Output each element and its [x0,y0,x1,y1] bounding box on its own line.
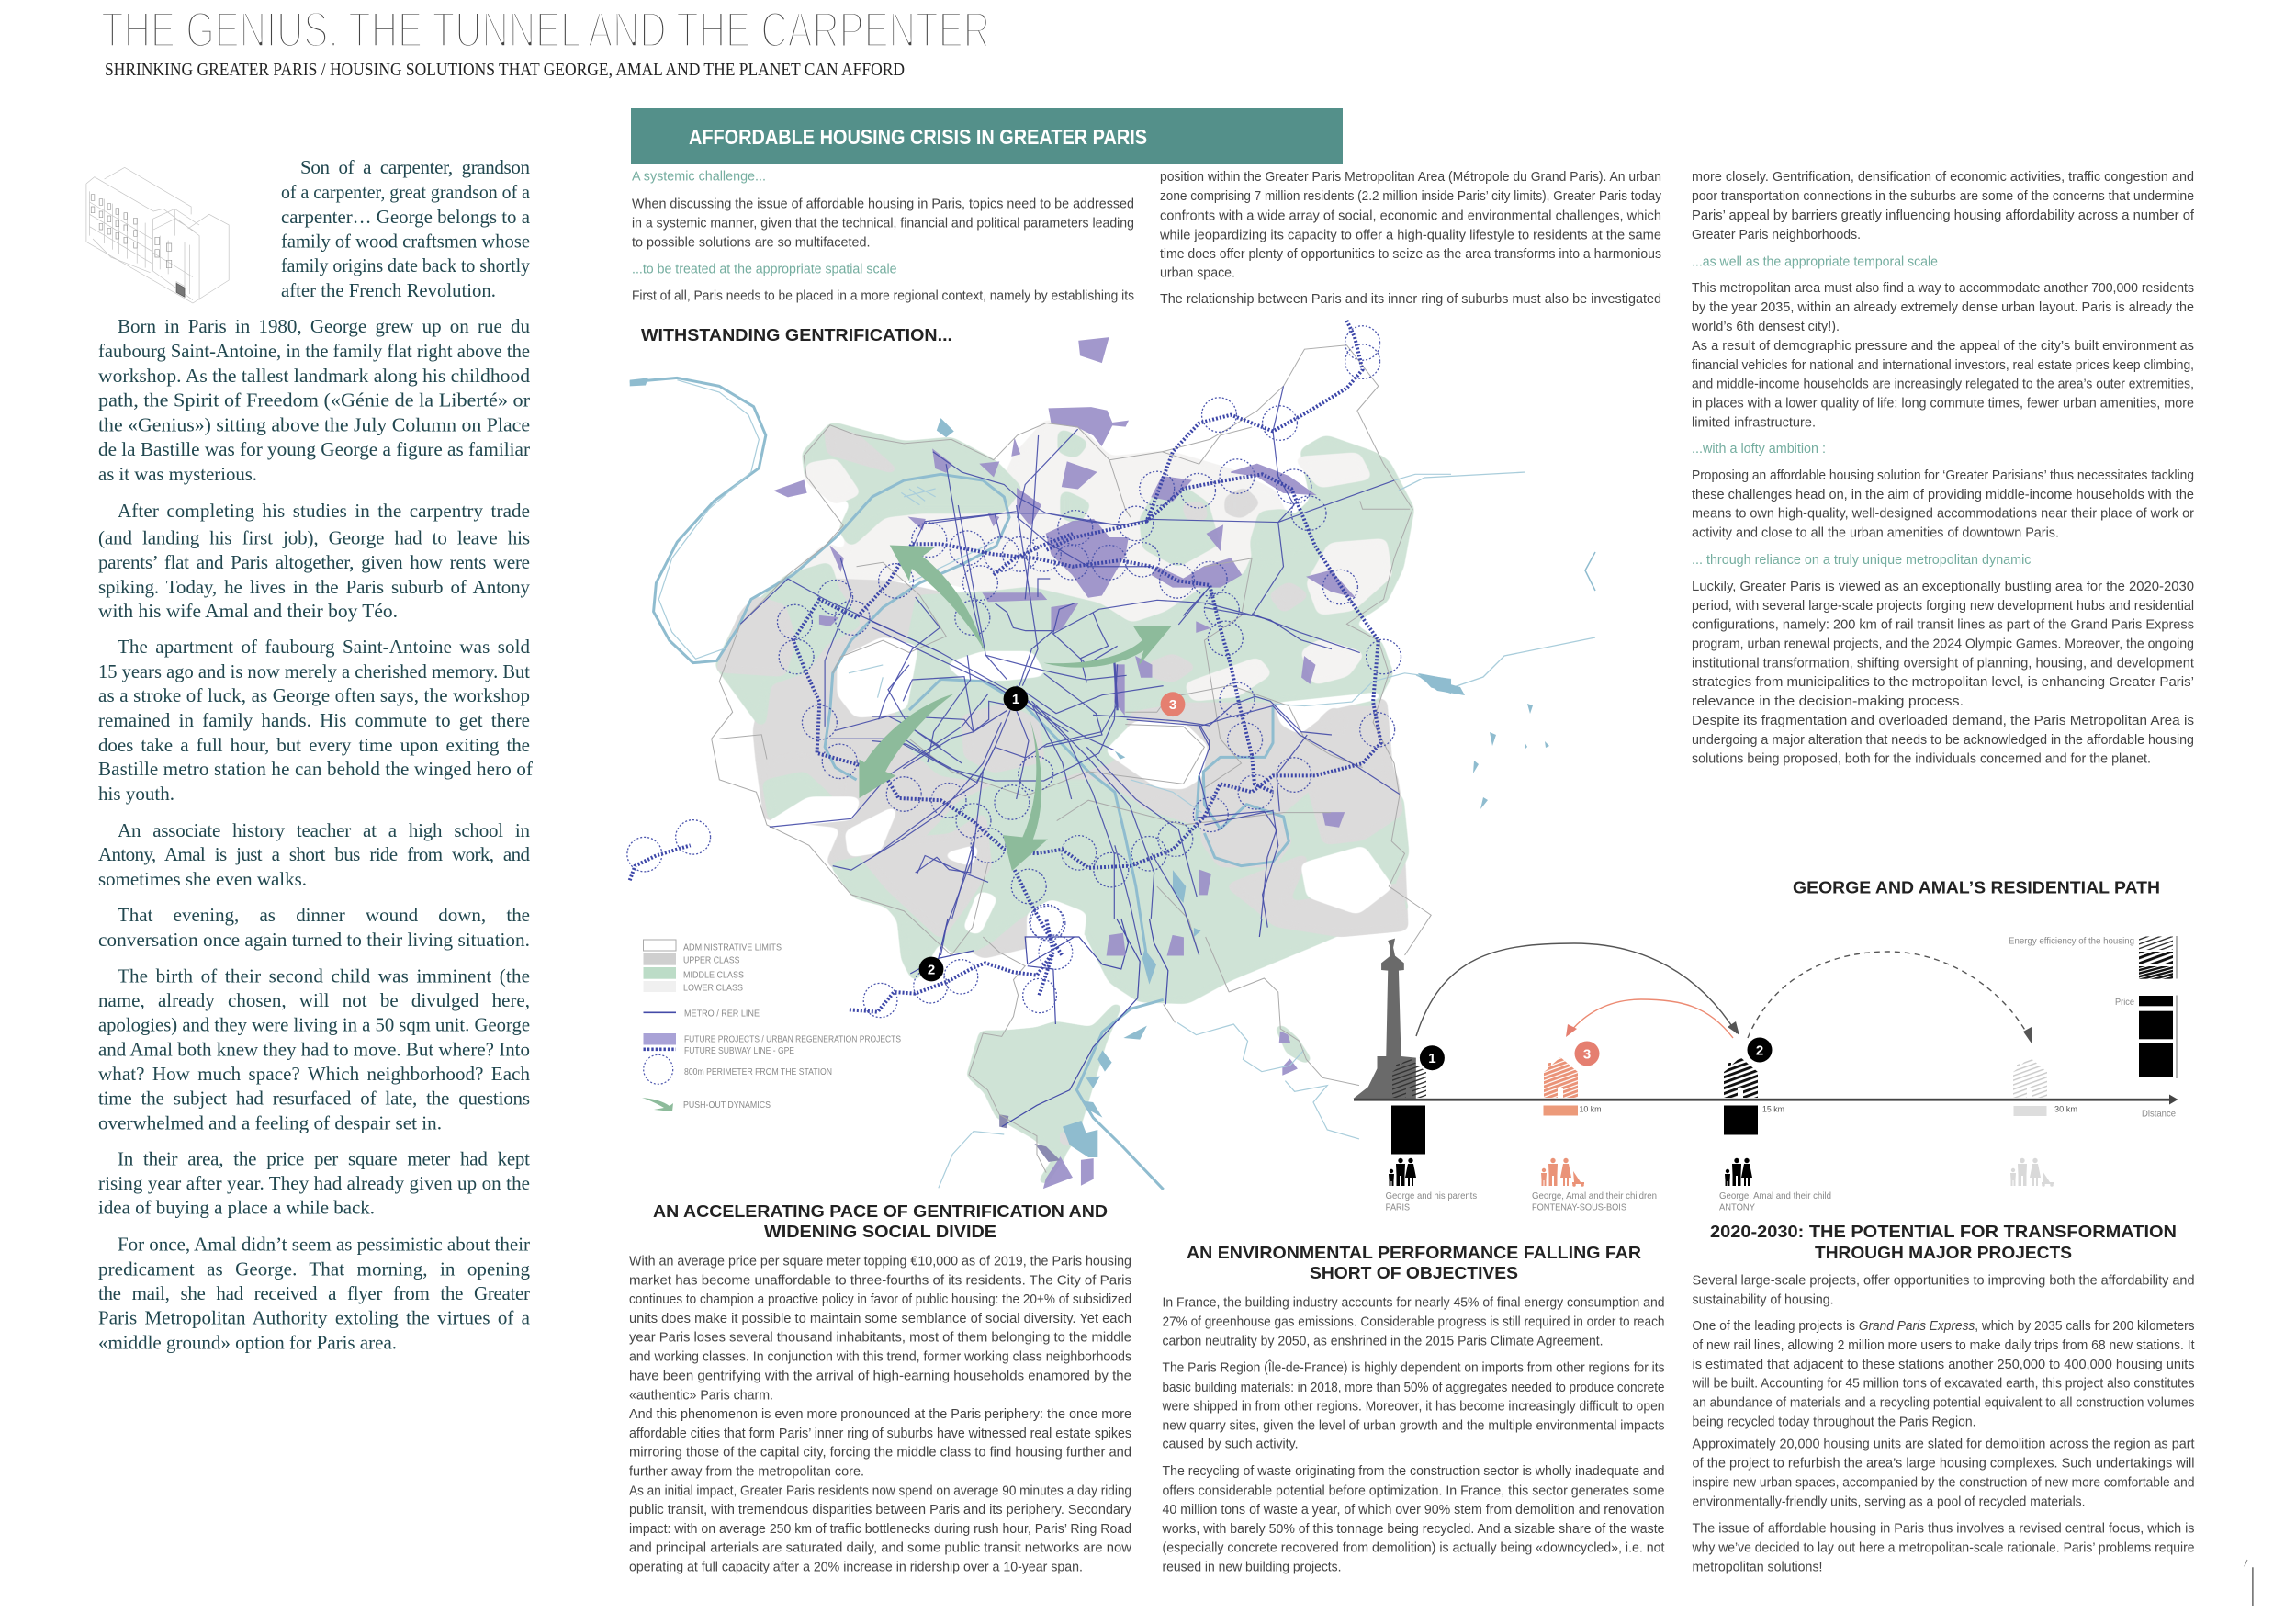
text block: environmental performance: 40 million tons of waste a year, of which over 90% stem from demolition and renovation [1163,1502,1664,1517]
paragraph: the birth: The birth of their second child was imminent (the [118,964,530,987]
heading: environmental performance [1187,1244,1641,1282]
icon: July Column [1353,939,1416,1099]
administrative borders [712,345,1431,955]
text block: gentrification: year Paris loses several thousand inhabitants, most of them belonging to the middle [629,1330,1131,1346]
text block: potential for transformation: metropolitan solutions! [1692,1559,1822,1574]
paragraph: son of a carpenter: of a carpenter, great grandson of a [281,181,531,203]
rivers [630,378,1451,955]
map marker 1 [1004,686,1028,711]
title: THE GENIUS, THE TUNNEL AND THE CARPENTER [101,1,990,58]
subtitle: SHRINKING GREATER PARIS / HOUSING SOLUTIONS THAT GEORGE, AMAL AND THE PLANET CAN AFFORD [105,61,905,80]
marker 3: 3 [1583,1047,1591,1062]
price bar Fontenay [1543,1104,1602,1115]
arrow: north-west push-out [890,546,985,653]
legend: lower class: LOWER CLASS [683,983,743,993]
text block: potential for transformation: of new rail lines, allowing 2 million more users to make daily trips from 68 new stations. It [1692,1337,2195,1353]
text block: crisis column 2: urban space. [1160,265,1235,281]
text block: crisis column 2: position within the Greater Paris Metropolitan Area (Métropole du Grand Paris). An urban [1160,169,1661,185]
text block: potential for transformation: Several large-scale projects, offer opportunities to improving both the affordability and [1692,1272,2195,1288]
paragraph: the birth: name, already chosen, will not be divulged here, [98,989,530,1011]
text block: crisis column 3: Paris’ appeal by barriers greatly influencing housing affordability across a number of [1692,208,2195,223]
legend: metro line: METRO / RER LINE [684,1009,760,1020]
text block: potential for transformation [1692,1272,2195,1574]
text block: crisis column 3: period, with several large-scale projects forging new development hubs and residential [1692,598,2194,614]
text block: crisis column 3: Proposing an affordable housing solution for ‘Greater Parisians’ thus necessitates tackling [1692,468,2194,483]
marker 1 [1420,1045,1445,1070]
text block: crisis column 2: time does offer plenty of opportunities to seize as the area transforms into a harmonious [1160,246,1661,262]
text block: crisis column 3: solutions being proposed, both for the individuals concerned and for the planet. [1692,751,2151,766]
paragraph: born in Paris: Born in Paris in 1980, George grew up on rue du [118,315,531,337]
banner: affordable housing crisis [631,108,1343,164]
family: future household [2010,1158,2054,1187]
arc: Paris to Antony [1416,943,1737,1036]
text block: gentrification: public transit, with tremendous disparities between Paris and its periphery. Secondary [629,1502,1131,1517]
legend: metro line [643,1009,760,1020]
arrowhead [2023,1027,2032,1043]
paragraph: the apartment: remained in family hands. His commute to get there [98,709,530,731]
paragraph: the apartment: The apartment of faubourg Saint-Antoine was sold [118,636,531,658]
paragraph: son of a carpenter: Son of a carpenter, grandson [300,156,531,178]
paragraph: for once: «middle ground» option for Paris area. [98,1331,397,1353]
legend: upper class: UPPER CLASS [683,955,740,965]
map: Greater Paris gentrification map [627,321,1595,1190]
map marker 1: 1 [1012,692,1019,707]
family: George, Amal and child [1719,1158,1831,1213]
map marker 3 [1161,692,1185,716]
legend: administrative limits [643,940,782,953]
text block: potential for transformation: is estimated that adjacent to these stations another 250,000 to 400,000 housing units [1692,1357,2195,1372]
map regions north and centre [719,423,1410,999]
text block: gentrification: market has become unaffordable to three-fourths of its residents. The City of Paris [629,1272,1131,1288]
page number [2244,1560,2254,1606]
price bar Fontenay: 10 km [1580,1104,1602,1115]
text block: crisis column 3: by the year 2035, within an already extremely dense urban layout. Paris is already the [1692,299,2194,315]
text block: crisis column 3: poor transportation connections in the suburbs are some of the concerns that undermine [1692,188,2194,204]
text block: crisis column 1: A systemic challenge... [632,169,766,185]
paragraph: an associate history teacher: An associate history teacher at a high school in [118,819,531,841]
heading: accelerating pace of gentrification [653,1202,1108,1241]
paragraph: in their area [98,1147,530,1219]
text block: gentrification: With an average price per square meter topping €10,000 as of 2019, the Paris housing [629,1254,1131,1269]
text block: crisis column 3: configurations, namely: 200 km of rail transit lines as part of the Grand Paris Express [1692,617,2194,633]
paragraph: after completing: spiking. Today, he lives in the Paris suburb of Antony [98,576,531,598]
paragraph: the apartment: Bastille metro station he can behold the winged hero of [98,758,533,780]
heading: residential path: GEORGE AND AMAL’S RESIDENTIAL PATH [1793,878,2160,897]
heading: 2020-2030 potential for transformation: 2020-2030: THE POTENTIAL FOR TRANSFORMATION [1710,1223,2177,1241]
legend: future subway: FUTURE SUBWAY LINE - GPE [684,1046,794,1056]
paragraph: in their area: rising year after year. They had already given up on the [98,1172,530,1194]
text block: crisis column 1: First of all, Paris needs to be placed in a more regional context, namely by establishing its [632,288,1134,304]
energy efficiency scale: Energy efficiency of the housing [2009,936,2134,947]
text block: crisis column 3: more closely. Gentrification, densification of economic activities, traffic congestion and [1692,169,2194,185]
chart: George and Amal's residential path [1353,936,2178,1213]
paragraph: an associate history teacher: sometimes she even walks. [98,868,307,890]
text block: environmental performance: reused in new building projects. [1163,1560,1341,1575]
text block: crisis column 3: financial vehicles for national and international investors, real estate prices keep climbing, [1692,357,2194,373]
legend: lower class [643,981,743,993]
text block: crisis column 3: institutional transformation, shifting oversight of planning, housing, and development [1692,656,2195,671]
house: Antony [1724,1057,1758,1098]
legend: future projects: FUTURE PROJECTS / URBAN REGENERATION PROJECTS [684,1035,901,1045]
text block: gentrification: As an initial impact, Greater Paris residents now spend on average 90 minutes a day riding [629,1483,1131,1498]
legend: middle class: MIDDLE CLASS [683,970,744,980]
paragraph: an associate history teacher [98,819,531,890]
text block: environmental performance: The Paris Region (Île-de-France) is highly dependent on imports from other regions for its [1163,1360,1664,1376]
text block: crisis column 1 [632,169,1134,304]
house: Paris [1392,1057,1426,1098]
text block: gentrification: and working classes. In conjunction with this trend, former working class neighborhoods [629,1349,1131,1365]
marker 2 [1747,1038,1773,1062]
text block: crisis column 3: This metropolitan area must also find a way to accommodate another 700,000 residents [1692,280,2194,296]
family: George, Amal and children: George, Amal and their children [1532,1190,1657,1201]
heading: 2020-2030 potential for transformation [1710,1223,2177,1262]
legend: middle class [643,967,744,980]
heading: accelerating pace of gentrification: AN ACCELERATING PACE OF GENTRIFICATION AND [653,1202,1108,1221]
text block: gentrification: impact: with on average 250 km of traffic bottlenecks during rush hour, Paris’ Ring Road [629,1521,1131,1537]
text block: crisis column 3 [1691,169,2195,766]
paragraph: in their area: idea of buying a place a while back. [98,1197,375,1219]
text block: potential for transformation: The issue of affordable housing in Paris thus involves a revised central focus, which is [1692,1521,2195,1537]
price bar Antony: 15 km [1762,1104,1784,1115]
arrow: east push-out [1043,626,1172,668]
text block: potential for transformation: Approximately 20,000 housing units are slated for demolition across the region as part [1692,1437,2195,1452]
text block: crisis column 2: while jeopardizing its capacity to offer a high-quality lifestyle to residents at the same [1159,227,1661,242]
text block: crisis column 1: ...to be treated at the appropriate spatial scale [632,261,896,276]
text block: crisis column 3: Despite its fragmentation and overloaded demand, the Paris Metropolitan Area is [1692,713,2194,728]
arc: Antony to Fontenay [1570,999,1733,1038]
text block: gentrification: affordable cities that form Paris’ inner ring of suburbs have witnessed real estate spikes [629,1426,1131,1441]
legend: push-out dynamics [642,1098,771,1111]
family: George and his parents: George and his parents [1386,1190,1477,1201]
metro network centre [872,505,1332,919]
project areas purple [775,338,1355,955]
text block: environmental performance: carbon neutrality by 2050, as enshrined in the 2015 Paris Climate Agreement. [1163,1333,1604,1348]
paragraph: the birth: what? How much space? Which neighborhood? Each [98,1063,531,1085]
text block: crisis column 3: Luckily, Greater Paris is viewed as an exceptionally bustling area for the 2020-2030 [1692,579,2194,594]
paragraph: for once: Paris Metropolitan Authority extoling the virtues of a [98,1307,531,1329]
text block: crisis column 2: The relationship between Paris and its inner ring of suburbs must also be investigated [1160,291,1661,307]
paragraph: for once: predicament as George. That morning, in opening [98,1257,531,1280]
text block: potential for transformation: environmentally-friendly units, serving as a pool of recycled materials. [1692,1494,2085,1509]
distance axis: Distance [2142,1109,2176,1120]
paragraph: born in Paris [98,315,531,485]
price scale [2115,996,2177,1078]
paragraph: for once: For once, Amal didn’t seem as pessimistic about their [118,1234,530,1256]
future subway line GPE [630,321,1381,955]
paragraph: born in Paris: the «Genius») sitting above the July Column on Place [98,413,530,435]
marker 3 [1574,1042,1600,1066]
map marker 2: 2 [928,963,935,977]
text block: gentrification: mirroring those of the capital city, forcing the middle class to find housing further and [629,1445,1131,1460]
paragraph: the birth [98,964,531,1133]
family: George, Amal and children: FONTENAY-SOUS-BOIS [1532,1202,1626,1213]
house: Fontenay-sous-Bois [1544,1057,1578,1098]
paragraph: the apartment: does take a full hour, but every time upon exiting the [98,734,530,756]
text block: environmental performance: The recycling of waste originating from the construction sector is wholly inadequate and [1163,1463,1664,1479]
paragraph: the apartment: 15 years ago and is now merely a cherished memory. But [98,660,530,682]
text block: gentrification: «authentic» Paris charm. [629,1387,773,1403]
marker 2: 2 [1756,1043,1763,1058]
banner: affordable housing crisis: AFFORDABLE HOUSING CRISIS IN GREATER PARIS [689,125,1147,149]
metro and RER lines [740,386,1400,955]
push-out arrows [859,546,1172,871]
text block: potential for transformation: why we’ve decided to lay out here a metropolitan-scale rationale. Paris’ problems require [1692,1540,2195,1556]
paragraph: the birth: apologies) and they were living in a 50 sqm unit. George [98,1014,530,1036]
heading: environmental performance: SHORT OF OBJECTIVES [1310,1264,1518,1282]
paragraph: the birth: overwhelmed and a feeling of despair set in. [98,1111,442,1133]
text block: crisis column 3: strategies from municipalities to the metropolitan level, is enhancing Greater Paris’ [1692,674,2194,690]
price bar future [2013,1104,2077,1116]
energy efficiency scale [2009,936,2177,979]
text block: potential for transformation: inspire new urban spaces, accompanied by the construction of new more comfortable and [1692,1474,2195,1490]
text block: crisis column 2: confronts with a wide array of social, economic and environmental challenges, which [1160,208,1661,223]
text block: gentrification: further away from the metropolitan core. [629,1463,864,1479]
family: George and his parents: PARIS [1386,1202,1410,1213]
map marker 3: 3 [1169,697,1176,713]
text block: potential for transformation: of the project to refurbish the area’s large housing complexes. Such undertakings will [1692,1456,2195,1472]
paragraph: son of a carpenter: family of wood craftsmen whose [281,230,530,252]
text block: gentrification [629,1254,1131,1575]
paragraph: son of a carpenter: carpenter… George belongs to a [281,206,531,228]
text block: gentrification: have been gentrifying with the arrival of high-earning households enamored by the [629,1369,1131,1384]
text block: George story (left column) [98,156,533,1353]
map regions south [850,905,1359,1190]
price scale: Price [2115,997,2134,1008]
legend: push-out dynamics: PUSH-OUT DYNAMICS [683,1100,771,1111]
text block: crisis column 1: in a systemic manner, given that the technical, financial and political parameters leading [632,216,1134,231]
paragraph: born in Paris: de la Bastille was for young George a figure as familiar [98,438,530,460]
paragraph: the apartment: as a stroke of luck, as George often says, the workshop [98,684,530,706]
heading: accelerating pace of gentrification: WIDENING SOCIAL DIVIDE [764,1223,996,1241]
text block: crisis column 3: program, urban renewal projects, and the 2024 Olympic Games. Moreover, the ongoing [1692,636,2194,652]
paragraph: after completing: parents’ flat and Paris altogether, given how rents were [98,551,530,573]
eastern rivers and lakes [1399,472,1595,809]
text block: crisis column 3: ... through reliance on a truly unique metropolitan dynamic [1692,552,2032,568]
text block: crisis column 3: in places with a lower quality of life: long commute times, fewer urban amenities, more [1692,395,2194,412]
text block: environmental performance: caused by such activity. [1163,1437,1299,1452]
legend: station perimeter: 800m PERIMETER FROM THE STATION [684,1067,832,1077]
text block: environmental performance [1162,1295,1665,1575]
paragraph: that evening: That evening, as dinner wound down, the [118,904,530,926]
legend: administrative limits: ADMINISTRATIVE LIMITS [683,942,782,953]
paragraph: son of a carpenter: family origins date back to shortly [281,254,530,276]
text block: environmental performance: were shipped in from other regions. Moreover, it has become increasingly difficult to open [1162,1399,1664,1415]
arrowhead [1728,1021,1739,1035]
text block: environmental performance: works, with barely 50% of this tonnage being recycled. And a sizable share of the waste [1162,1521,1664,1537]
paragraph: born in Paris: workshop. As the tallest landmark along his childhood [98,365,531,387]
text block: crisis column 1: When discussing the issue of affordable housing in Paris, topics need to be addressed [632,197,1134,212]
text block: crisis column 3: As a result of demographic pressure and the appeal of the city’s built environment as [1692,338,2194,354]
text block: gentrification: And this phenomenon is even more pronounced at the Paris periphery: the once more [629,1406,1131,1422]
text block: crisis column 3: Greater Paris neighborhoods. [1692,227,1861,242]
text block: crisis column 3: ...with a lofty ambition : [1692,441,1826,457]
arrow: south push-out [1003,718,1048,871]
paragraph: after completing: After completing his studies in the carpentry trade [118,500,530,522]
arc: Antony to future [1748,952,2030,1038]
text block: potential for transformation: being recycled today throughout the Paris Region. [1692,1414,1976,1429]
text block: environmental performance: 27% of greenhouse gas emissions. Considerable progress is still required in order to reach [1163,1314,1664,1329]
text block: gentrification: and principal arterials are saturated daily, and some public transit networks are now [629,1540,1131,1556]
text block: potential for transformation: sustainability of housing. [1692,1291,1833,1307]
paragraph: that evening: conversation once again turned to their living situation. [98,929,530,951]
legend: future projects [643,1033,901,1045]
paragraph: an associate history teacher: Antony, Amal is just a short bus ride from work, and [98,843,531,865]
text block: crisis column 3: means to own high-quality, well-designed accommodations near their place of work or [1692,505,2194,522]
paragraph: born in Paris: faubourg Saint-Antoine, in the family flat right above the [98,340,530,362]
text block: environmental performance: (especially concrete recovered from demolition) is actually being «downcycled», i.e. not [1163,1540,1665,1556]
paragraph: the apartment [98,636,533,805]
heading: environmental performance: AN ENVIRONMENTAL PERFORMANCE FALLING FAR [1187,1244,1641,1262]
text block: crisis column 2 [1159,169,1661,307]
paragraph: after completing: (and landing his first job), George had to leave his [98,527,530,549]
paragraph: born in Paris: path, the Spirit of Freedom («Génie de la Liberté» or [98,389,530,412]
family: George, Amal and child: George, Amal and their child [1719,1190,1831,1201]
text block: environmental performance: basic building materials: in 2018, more than 50% of aggregates needed to produce concrete [1163,1380,1664,1395]
text block: gentrification: units does make it possible to maintain some semblance of social diversity. Yet each [629,1311,1131,1326]
text block: gentrification: operating at full capacity after a 20% increase in ridership over a 10-year span. [629,1560,1083,1575]
distance axis [1354,1095,2178,1120]
text block: potential for transformation: One of the leading projects is Grand Paris Express, which by 2035 calls for 200 kilometers [1692,1318,2195,1334]
paragraph: the birth: time the subject had resurfaced of late, the questions [98,1088,530,1110]
text block: crisis column 3: relevance in the decision-making process. [1692,694,1964,709]
legend: upper class [643,953,740,965]
text block: crisis column 3: ...as well as the appropriate temporal scale [1692,254,1938,270]
paragraph: son of a carpenter [281,156,531,301]
station perimeter circles [627,326,1401,941]
text block: environmental performance: new quarry sites, given the level of urban growth and the multiple environmental impacts [1163,1417,1664,1433]
text block: crisis column 1: to possible solutions are so multifaceted. [632,234,871,250]
arrowhead [1566,1024,1577,1037]
paragraph: the birth: and Amal both knew they had to move. But where? Into [98,1038,530,1060]
arrow: south-west push-out [859,694,954,798]
price bar future: 30 km [2054,1104,2077,1115]
legend: station perimeter [644,1054,832,1084]
price bar Paris [1391,1106,1425,1154]
text block: crisis column 3: undergoing a major alteration that needs to be acknowledged in the affordable housing [1692,732,2194,748]
text block: potential for transformation: will be built. Accounting for 45 million tons of excavated earth, this project also constitutes [1692,1376,2195,1392]
legend [642,940,901,1111]
icon: isometric building drawing [86,167,229,303]
family: George and his parents [1386,1158,1477,1213]
text block: crisis column 3: these challenges head on, in the aim of providing middle-income households with the [1692,487,2194,502]
text block: crisis column 3: limited infrastructure. [1692,415,1816,430]
price bar Antony [1724,1104,1784,1135]
house: future [2013,1057,2047,1098]
text block: environmental performance: In France, the building industry accounts for nearly 45% of final energy consumption and [1163,1295,1664,1311]
family: George, Amal and child: ANTONY [1719,1202,1755,1213]
heading: 2020-2030 potential for transformation: THROUGH MAJOR PROJECTS [1815,1244,2072,1262]
map marker 2 [919,957,943,981]
text block: gentrification: continues to champion a proactive policy in favor of public housing: the 20+% of subsidized [629,1291,1131,1307]
marker 1: 1 [1428,1051,1436,1066]
heading: withstanding gentrification: WITHSTANDING GENTRIFICATION... [641,326,952,344]
family: George, Amal and children [1532,1158,1657,1213]
paragraph: after completing: with his wife Amal and their boy Téo. [98,600,398,622]
paragraph: son of a carpenter: after the French Revolution. [281,279,496,301]
paragraph: that evening [98,904,530,951]
text block: potential for transformation: an abundance of materials and a recycling potential equivalent to all construction volumes [1692,1394,2195,1410]
text block: crisis column 3: activity and close to all the urban amenities of downtown Paris. [1692,525,2059,540]
text block: crisis column 3: world’s 6th densest city!). [1691,319,1840,334]
text block: crisis column 3: and middle-income households are increasingly relegated to the area’s outer extremities, [1692,377,2194,392]
paragraph: after completing [98,500,531,622]
text block: environmental performance: offers considerable potential before optimization. In France, this sector generates some [1163,1483,1664,1498]
paragraph: born in Paris: as it was mysterious. [98,463,257,485]
text block: crisis column 2: zone comprising 7 million residents (2.2 million inside Paris’ city limits), Greater Paris today [1160,188,1661,204]
paragraph: in their area: In their area, the price per square meter had kept [118,1147,530,1169]
paragraph: the apartment: his youth. [98,783,174,805]
paragraph: for once: the mail, she had received a flyer from the Greater [98,1282,530,1304]
paragraph: for once [98,1234,531,1353]
